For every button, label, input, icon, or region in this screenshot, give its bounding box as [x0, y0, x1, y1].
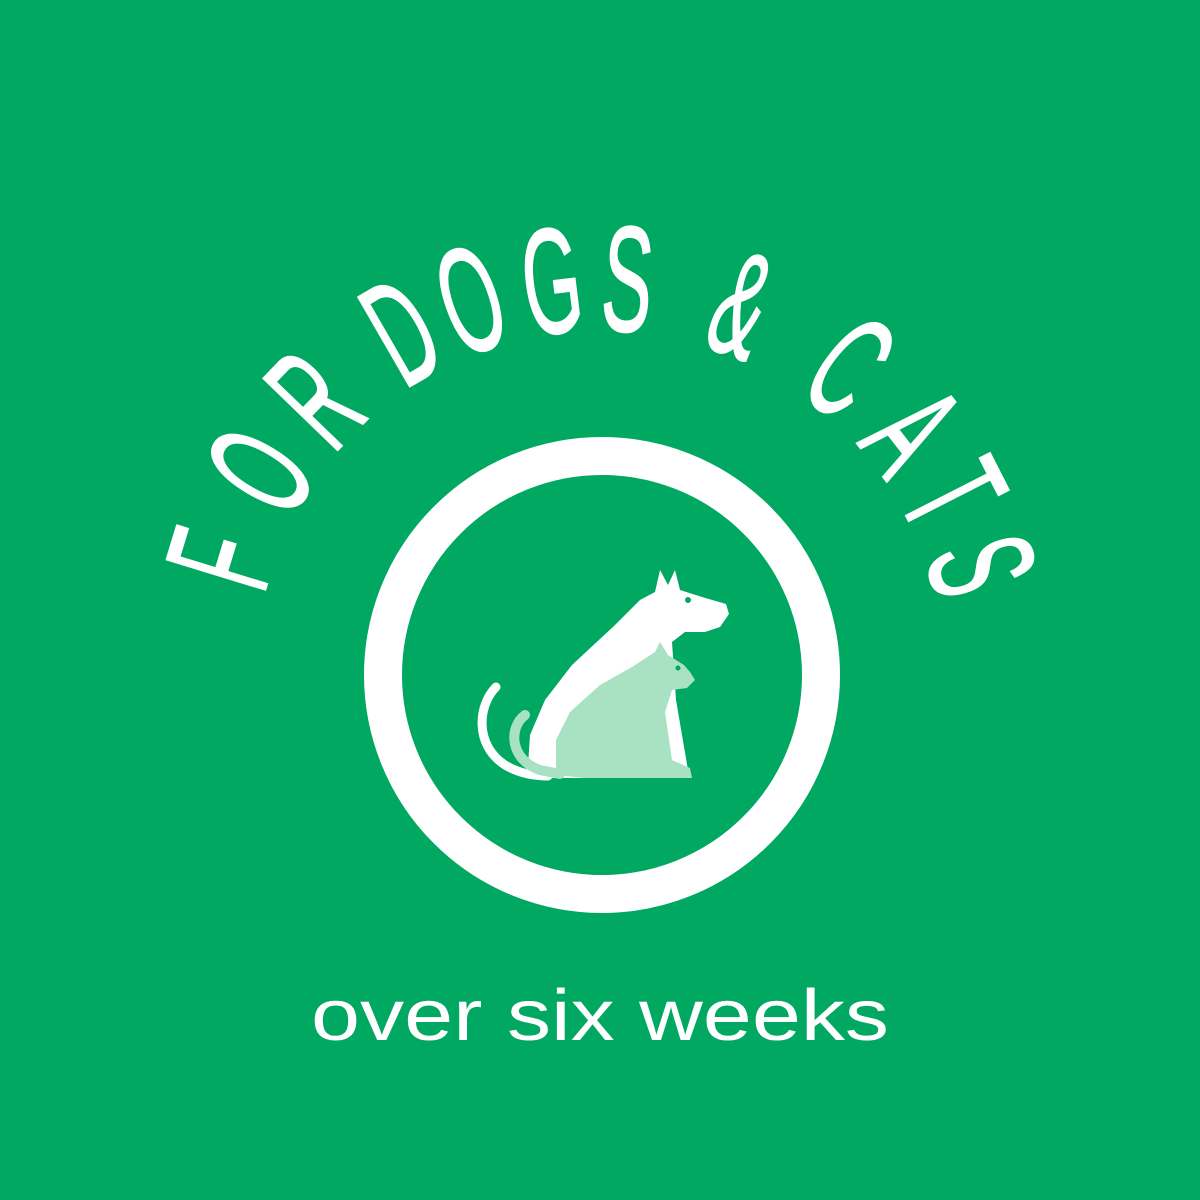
title: curved text: F: [135, 513, 308, 606]
title: curved text: S: [893, 519, 1067, 613]
title: curved text: C: [775, 286, 923, 449]
title: curved text: G: [513, 196, 591, 369]
ring: [383, 456, 821, 894]
title: curved text: D: [337, 247, 467, 418]
subtitle: over six weeks: [311, 976, 889, 1056]
cat tail: [514, 715, 560, 774]
cat: [556, 642, 695, 778]
title: curved text: S: [597, 195, 658, 365]
title: curved text: O: [416, 213, 526, 389]
dog tail: [482, 687, 548, 776]
title: curved text: A: [831, 360, 993, 503]
dog: [528, 570, 729, 778]
title: curved text: [135, 195, 1067, 613]
title: curved text: &: [689, 219, 795, 393]
title: curved text: T: [868, 437, 1037, 554]
title: curved text: O: [174, 403, 347, 539]
title: curved text: R: [237, 323, 394, 478]
icon: dog and cat: [482, 570, 729, 778]
